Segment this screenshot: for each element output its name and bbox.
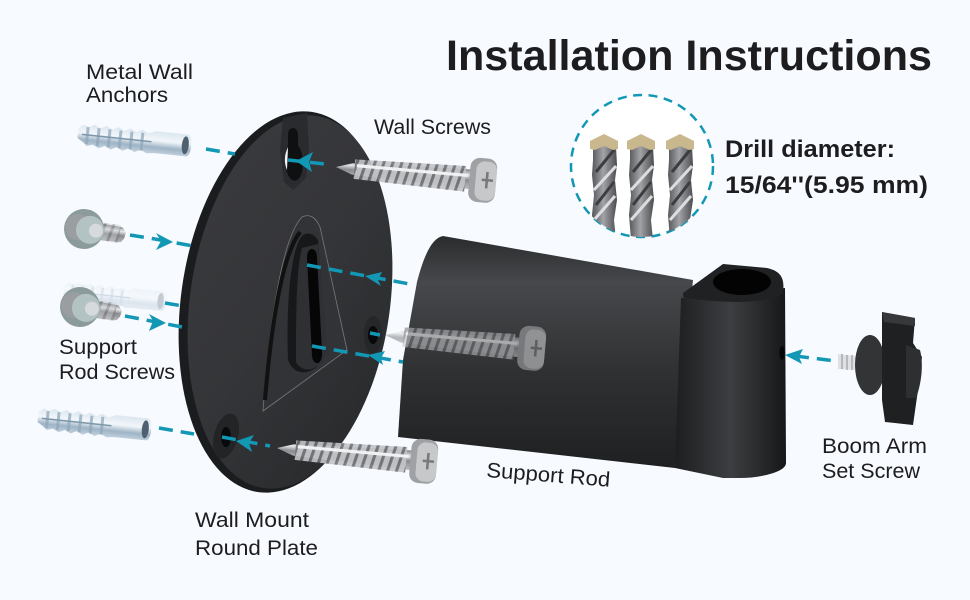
label: boom arm set screw: Set Screw (822, 460, 921, 483)
drill diameter note: 15/64''(5.95 mm) (725, 172, 928, 199)
arrow: bottom anchor (159, 428, 194, 434)
metal wall anchor, bottom (37, 407, 152, 442)
arrow: bottom wall screw to hole (222, 435, 270, 452)
lower-left screw hole (208, 411, 244, 461)
label: metal wall anchors: Anchors (86, 84, 168, 107)
middle wall screw, ghosted through rod (383, 313, 547, 372)
support rod screw, lower (57, 284, 124, 333)
label: support rod screws: Rod Screws (59, 361, 175, 384)
triangular bracket recess (263, 216, 347, 411)
right screw hole (364, 316, 382, 354)
drill diameter note: Drill diameter: (725, 136, 895, 163)
support rod screw, upper (61, 206, 128, 255)
wall mount round plate (155, 97, 415, 507)
title: Installation Instructions (446, 32, 932, 80)
ghost wall anchor (63, 281, 167, 312)
icon: drill bit middle (627, 134, 655, 240)
metal wall anchor, top (77, 123, 192, 158)
arrow: top wall screw to keyhole (288, 152, 325, 172)
arrow: rod to upper slot (307, 265, 415, 286)
label: boom arm set screw: Boom Arm (822, 435, 927, 458)
label: support rod screws: Support (59, 336, 137, 359)
arrow: lower rod screw (125, 314, 182, 331)
icon: drill bit left (590, 134, 618, 240)
boom arm set screw knob (838, 312, 922, 425)
keyhole slot (280, 113, 309, 190)
top wall screw (334, 145, 498, 204)
arrow: rod to lower slot (312, 346, 403, 365)
arrow: top anchor (206, 149, 235, 154)
arrow: ghost anchor (165, 303, 183, 306)
support rod (398, 236, 786, 478)
label: wall screws: Wall Screws (374, 116, 491, 139)
label: wall mount round plate: Round Plate (195, 537, 318, 560)
icon: drill bit right (666, 134, 694, 240)
arrow: upper rod screw (130, 233, 193, 250)
label: wall mount round plate: Wall Mount (195, 509, 309, 532)
bottom wall screw (275, 426, 439, 485)
drill bits circle (571, 95, 713, 240)
arrow: set screw to collar (785, 349, 836, 364)
arrow: hole centre (370, 333, 380, 335)
label: support rod: Support Rod (486, 459, 611, 492)
label: metal wall anchors: Metal Wall (86, 61, 193, 84)
